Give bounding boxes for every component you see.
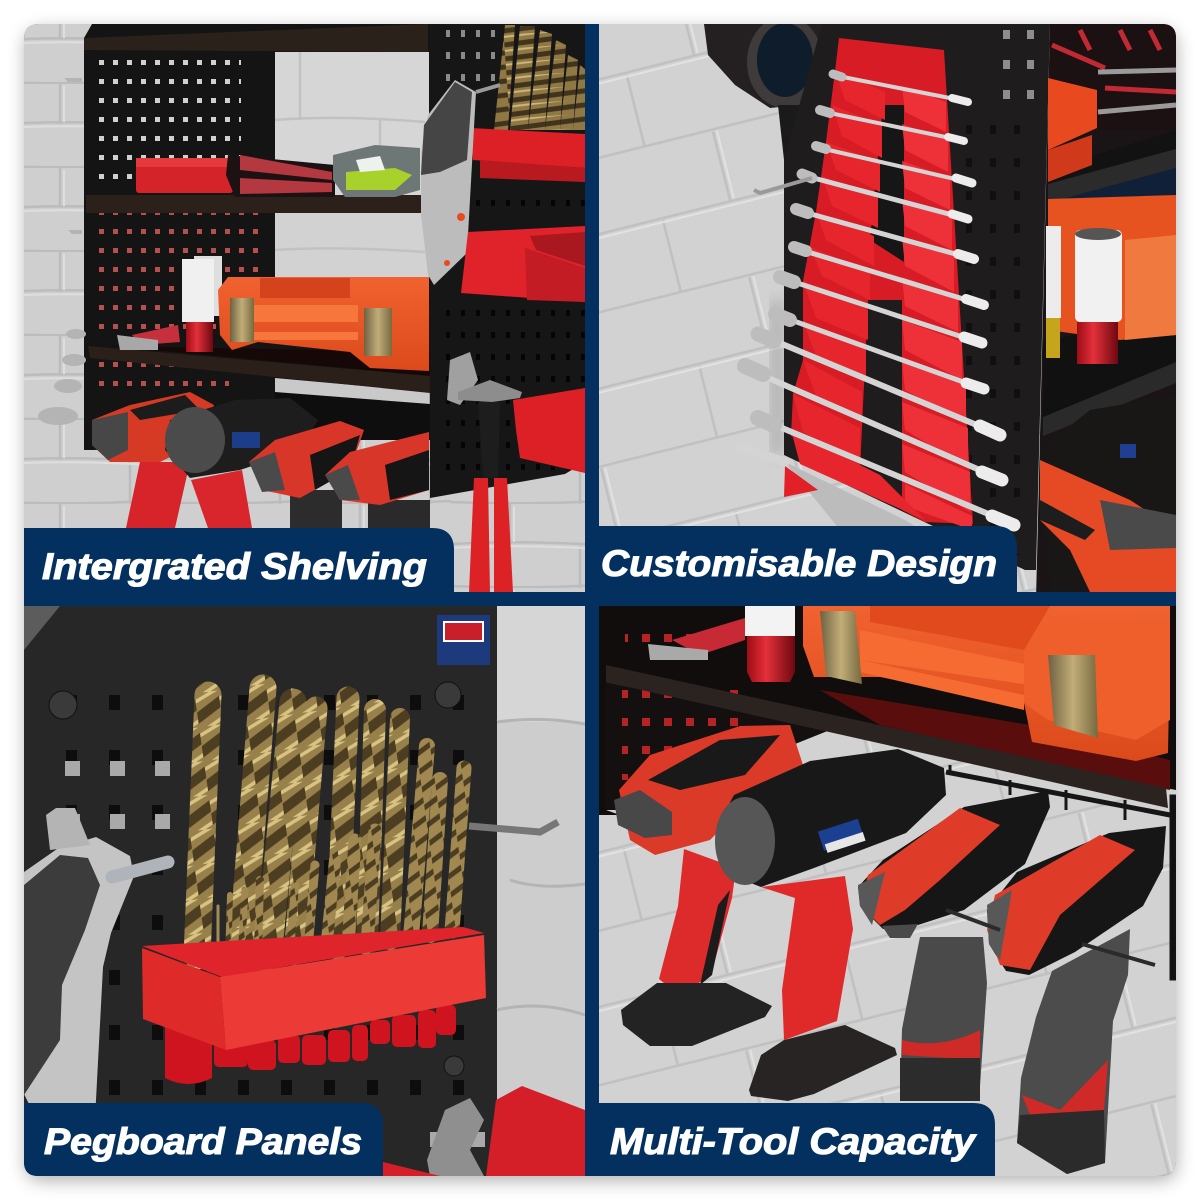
brick wall — [497, 606, 585, 1176]
pegboard — [784, 24, 1050, 570]
panel: multi-tool capacity — [585, 606, 1176, 1176]
red tool — [486, 1086, 585, 1176]
side hook — [754, 178, 812, 193]
drill D — [987, 826, 1166, 1174]
shelves — [84, 24, 430, 393]
sealey badge — [437, 615, 490, 665]
drill two — [165, 398, 318, 528]
left fins — [791, 71, 925, 520]
red box — [136, 158, 233, 193]
screws — [49, 682, 464, 1076]
red bit holder — [471, 128, 585, 182]
right pegboard — [429, 24, 585, 498]
red bin — [461, 226, 585, 302]
tab: multi-tool capacity: Multi-Tool Capacity — [610, 1121, 978, 1162]
rear pegboard — [599, 606, 1176, 815]
tab: intergrated shelving: Intergrated Shelving — [42, 546, 427, 587]
drill B — [715, 749, 946, 1101]
gloves — [226, 155, 335, 197]
red strip — [383, 1162, 440, 1176]
white socket — [182, 256, 222, 352]
right fins — [902, 86, 972, 530]
brick wall — [599, 24, 1176, 592]
drill C — [858, 791, 1050, 1101]
right hook — [469, 822, 558, 832]
red bit holder tips — [165, 1005, 456, 1084]
small sockets — [117, 325, 180, 350]
shelf front edge — [606, 665, 1168, 808]
pliers — [458, 380, 522, 592]
orange box — [1048, 78, 1097, 182]
shelf surface reflection — [820, 690, 1170, 790]
shelves background — [1036, 24, 1176, 600]
tab: pegboard panels — [24, 1103, 383, 1176]
drill one — [92, 392, 214, 528]
left pegboard — [84, 24, 430, 450]
tape measure — [704, 16, 823, 108]
small sockets — [648, 618, 745, 660]
gloves — [1052, 30, 1176, 112]
tab: pegboard panels: Pegboard Panels — [44, 1121, 362, 1162]
pegboard — [24, 606, 497, 1176]
drill A — [614, 725, 803, 1046]
red wrench holder — [791, 38, 973, 530]
panel: integrated shelving — [24, 24, 586, 592]
wall hanger — [427, 1098, 484, 1176]
hanger hook — [447, 352, 478, 405]
knife — [24, 808, 168, 1176]
drill three — [249, 421, 364, 528]
wrenches — [740, 74, 1014, 525]
panel: pegboard panels — [24, 606, 585, 1176]
brick wall — [24, 24, 585, 592]
tab: customisable design: Customisable Design — [601, 543, 997, 584]
orange case — [1048, 195, 1176, 340]
drill bits — [197, 688, 464, 965]
tape strap — [778, 105, 800, 160]
red bit holder — [142, 927, 486, 1050]
front rods — [946, 910, 1155, 965]
black rail below board — [788, 464, 914, 526]
wrenches on side — [38, 78, 86, 425]
brick wall — [599, 606, 1176, 1176]
lower red bin — [513, 388, 585, 473]
red foot — [784, 466, 818, 497]
panel: customisable design — [585, 16, 1176, 600]
hanging rail — [946, 765, 1176, 980]
white sockets — [1046, 226, 1122, 364]
socket — [745, 606, 795, 682]
orange tool case — [218, 277, 429, 371]
orange tool case — [803, 606, 1170, 761]
safety goggles — [333, 145, 420, 197]
drill four — [325, 432, 430, 528]
drill — [1040, 395, 1176, 592]
drill bits in holder — [494, 25, 586, 130]
tab: intergrated shelving — [24, 528, 454, 592]
tab: customisable design — [585, 526, 1017, 592]
tab: multi-tool capacity — [585, 1103, 995, 1176]
utility knife — [421, 80, 500, 285]
wrench board shadow — [772, 300, 782, 460]
